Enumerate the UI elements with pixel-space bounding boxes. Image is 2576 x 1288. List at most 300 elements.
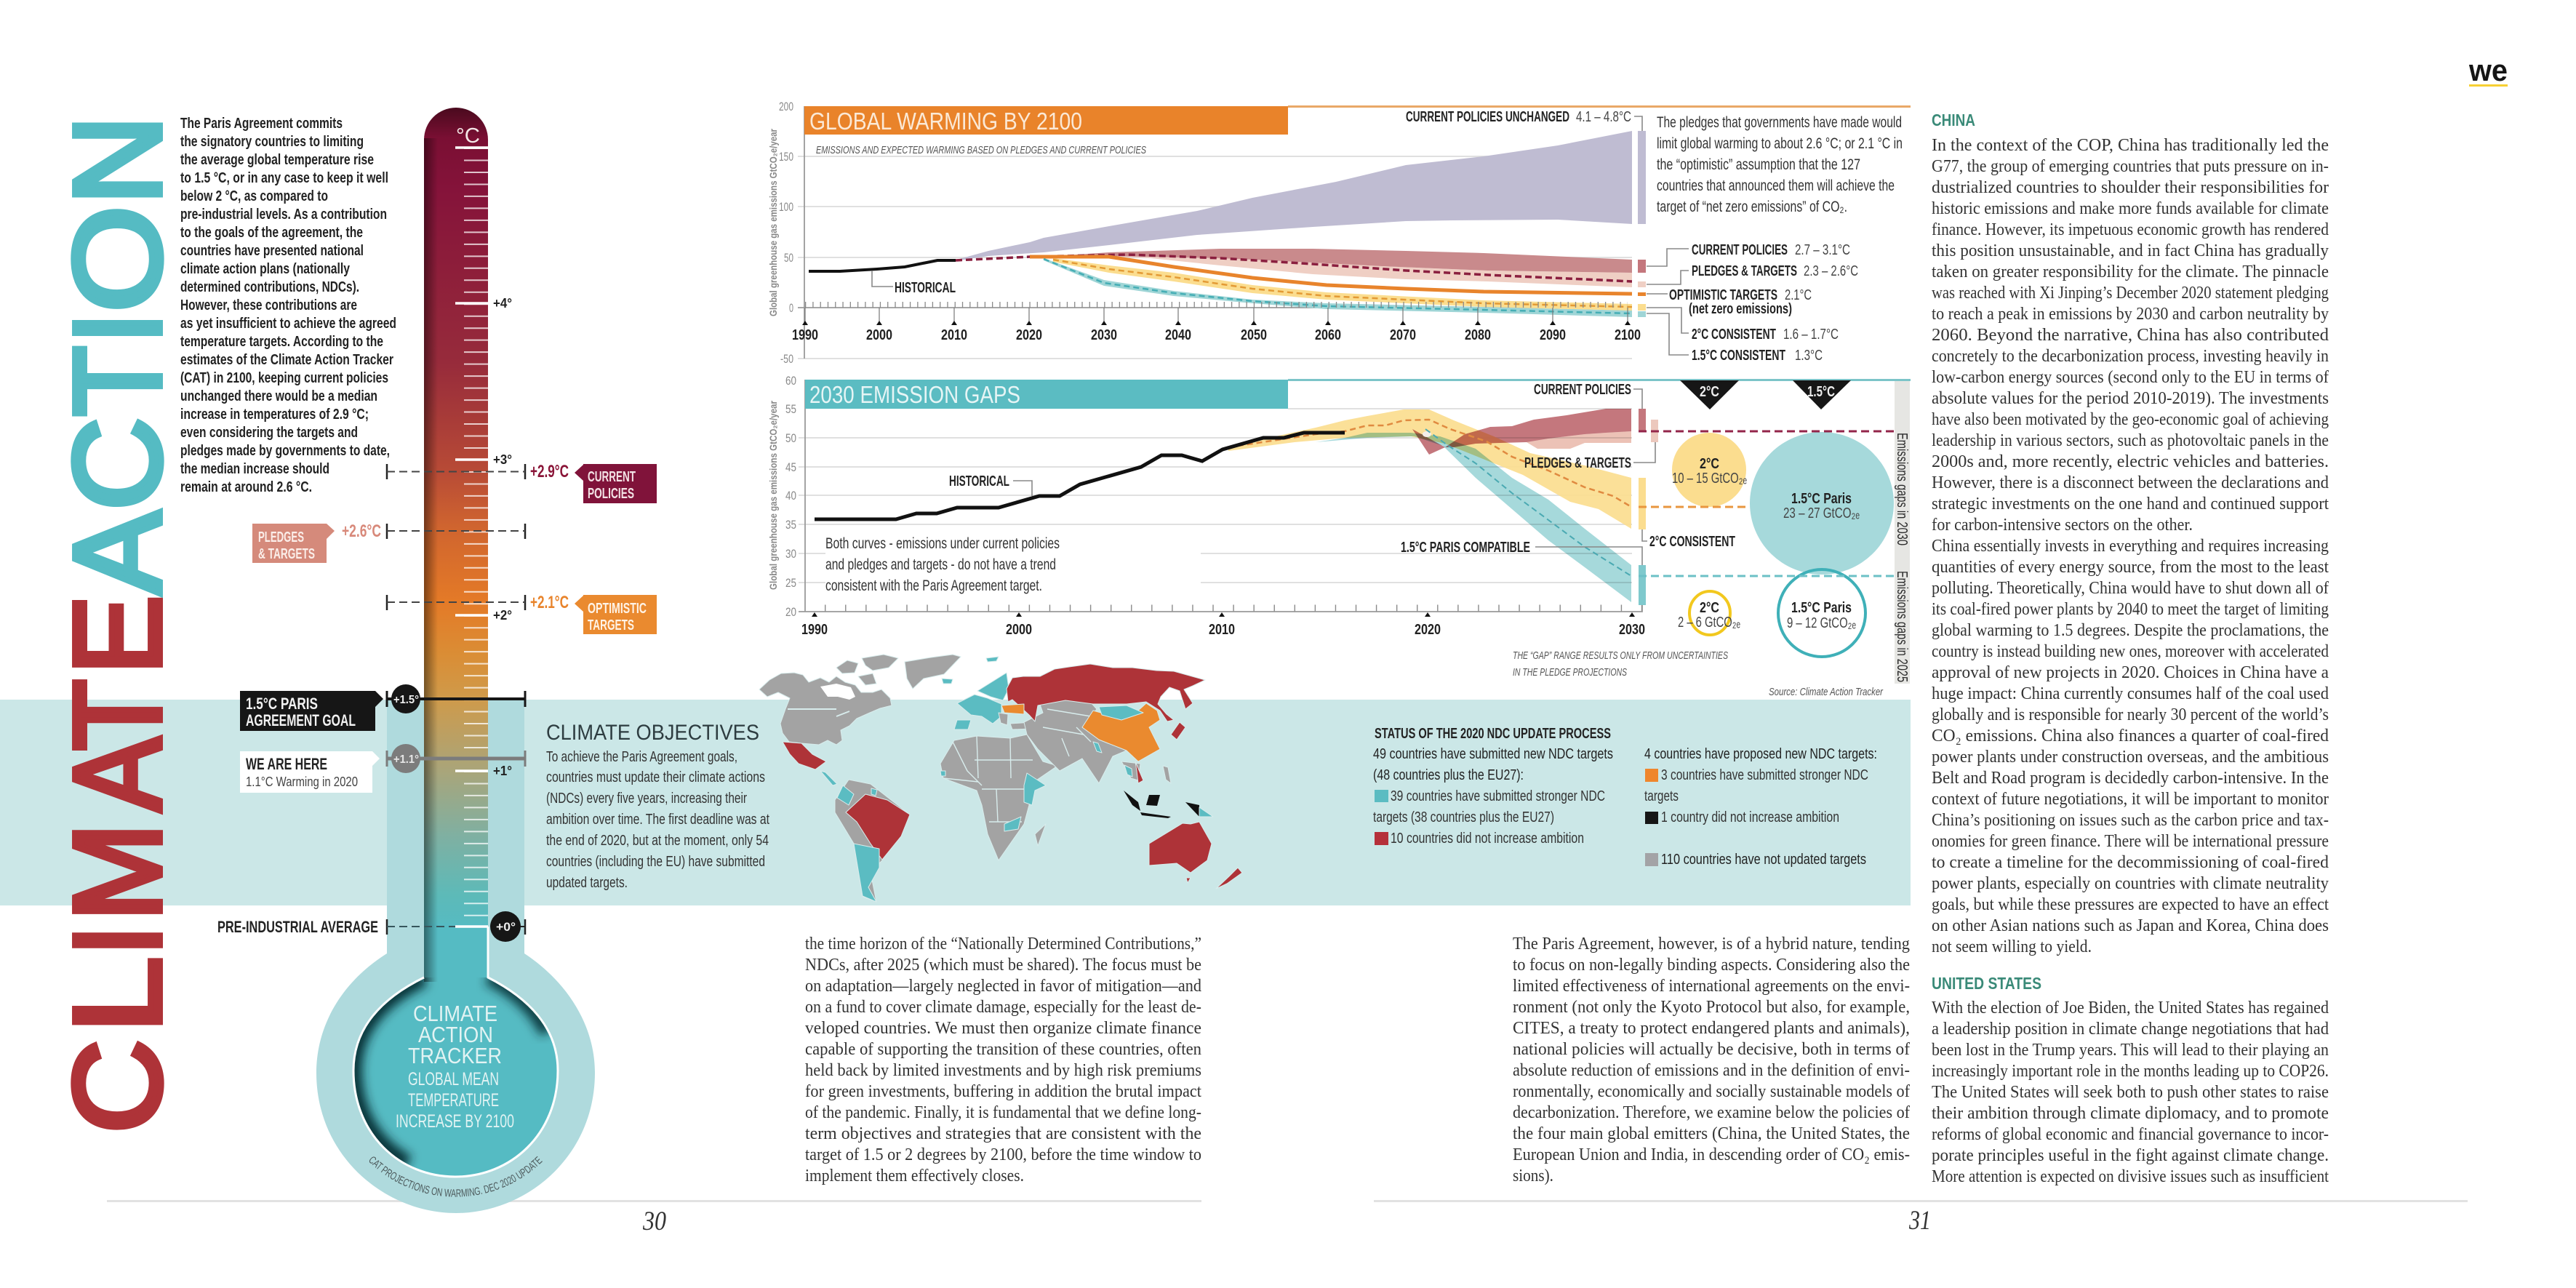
intro paragraph: Paris Agreement [180,116,396,495]
objectives body: To achieve the Paris Agreement goals, [546,749,737,765]
chart 1 year labels: 2100 [1615,327,1641,343]
map: Russia [1007,664,1205,721]
intro paragraph: Paris Agreement: remain at around 2.6 °C. [180,479,312,495]
chart 1 gridlines [798,156,1632,359]
scale ticks [455,148,488,927]
chart 2 axis [799,380,1642,612]
chart 2 dip highlight [1423,431,1431,437]
vertical title: CLIMATE ACTION: I [48,312,186,344]
map: Vietnam [1135,761,1143,783]
chart 1 header rule [1288,105,1911,108]
vertical title: CLIMATE ACTION: L [49,957,187,1033]
bulb heading: INCREASE BY 2100 [396,1111,514,1132]
chart 1 line: pledges dashed [956,255,1632,281]
map: Turkey [1010,722,1032,729]
map: Philippines [1163,766,1171,783]
chart 2 note: consistent with the Paris Agreement target. [825,577,1042,594]
page number 31: 31 [1908,1206,1931,1236]
vertical title: CLIMATE ACTION: O [49,206,187,312]
intro paragraph: Paris Agreement: the median increase should [180,461,329,477]
map: Scandinavia [977,673,1009,700]
chart 1 line: 2C dashed [1053,260,1632,307]
marker: pre-industrial average [217,911,525,942]
side strip: Emissions gaps in 2025 [1894,571,1910,682]
chart 1 year labels: 2060 [1315,327,1341,343]
chart 1 y axis title: Global greenhouse gas emissions GtCO₂e/year [767,129,779,316]
marker: +2.6 pledges and targets: & TARGETS [258,546,315,562]
chart 2 label: pledges and targets: PLEDGES & TARGETS [1524,455,1631,471]
scale labels: +1° [493,764,512,778]
world map [759,655,1242,902]
article column: page 30: for green investments, buffering in addition the brutal impact [805,1081,1201,1101]
China body text: China essentially invests in everything and requires increasing [1932,536,2329,556]
chart 2 note: and pledges and targets - do not have a trend [825,556,1056,573]
gap bubble: 1.5C in 2030: 23 – 27 GtCO₂ₑ [1783,505,1860,521]
chart 2 line: historical [815,433,1345,519]
source line: Source: Climate Action Tracker [1769,686,1884,698]
chart 2 year labels: 2030 [1619,622,1645,638]
chart 1 year labels: 2000 [866,327,892,343]
legend column 1: 10 countries did not increase ambition [1391,831,1584,847]
chart 1 year labels: 1990 [792,327,818,343]
map: Chile and Argentina [854,844,879,902]
China body text: leadership in various sectors, such as photovoltaic panels in the [1932,431,2329,450]
map: Indonesia [1124,791,1199,818]
chart 2 y axis labels: 35 [785,518,796,532]
objectives body: countries must update their climate actions [546,769,765,785]
chart 2 y axis labels: 30 [785,547,796,561]
legend column 1 [1373,746,1613,847]
article column: page 30: on adaptation—largely neglected in favor of mitigation—and [805,976,1201,996]
chart 2 gap note [1513,649,1728,679]
chart 2 area: 1.5C compatible [1316,433,1631,602]
chart 1 area: current policies unchanged [954,131,1632,261]
China body text: low-carbon energy sources (second only to the EU in terms of [1932,367,2329,387]
article column: page 31 left: the four main global emitters (China, the United States, the [1513,1124,1910,1143]
chart 2 y axis labels [785,374,796,619]
gap bubble: 1.5C in 2030 [1750,432,1894,575]
chart 1 label: pledges and targets: 2.3 – 2.6°C [1804,263,1858,279]
map: Arctic island north [862,655,898,671]
bulb heading: TEMPERATURE [408,1090,499,1111]
map: Madagascar [1035,824,1046,846]
chart 1 y axis labels: 0 [789,301,793,315]
article column: page 31 left: The Paris Agreement, however, is of a hybrid nature, tending [1513,934,1910,953]
heading: China: CHINA [1932,111,1975,129]
chart 2 year labels: 2000 [1006,622,1032,638]
map: Ukraine [1001,704,1024,714]
China body text: context of future negotiations, it will be important to monitor [1932,789,2329,809]
article column: page 31 left [1513,934,1911,1185]
bulb outline [353,927,558,1177]
United States body text: a leadership position in climate change negotiations that had [1932,1019,2329,1039]
article column: page 30: target of 1.5 or 2 degrees by 2100, before the time window to [805,1145,1201,1164]
United States body text: their ambition through climate diplomacy, and to promote [1932,1103,2329,1123]
side strip: Emissions gaps in 2030 [1894,433,1910,545]
China body text: its coal-fired power plants by 2040 to meet the target of limiting [1932,599,2329,619]
chart 1 label: pledges and targets: PLEDGES & TARGETS [1692,263,1797,279]
United States body text [1932,998,2329,1186]
gap marker: 1.5C triangle: 1.5°C [1807,384,1835,400]
map: East Africa [1024,773,1046,805]
map: Hudson Bay [820,684,855,700]
map: Europe [957,695,1001,724]
intro paragraph: Paris Agreement: pledges made by governments to date, [180,443,390,459]
bulb heading: CLIMATE [413,1001,497,1026]
map: Iran teal [1093,742,1102,753]
China body text: taken on greater responsibility for the climate. The pinnacle [1932,262,2329,281]
chart panel: global warming by 2100 [767,100,1911,366]
chart 1 label: current policies: CURRENT POLICIES [1692,242,1788,258]
map: West Africa [940,771,945,776]
chart 2 label: 1.5C compatible: 1.5°C PARIS COMPATIBLE [1401,540,1530,556]
chart 1 y axis labels [779,100,793,366]
chart 1 year labels: 2020 [1016,327,1042,343]
intro paragraph: Paris Agreement: below 2 °C, as compared to [180,188,328,204]
gap ring: 2C in 2025: 2 – 6 GtCO₂ₑ [1678,615,1740,631]
map: Spain [954,720,971,729]
chart 2 area: pledges and targets [1527,431,1631,449]
China body text: quantities of every energy source, from the most to the least [1932,557,2329,577]
objectives body [546,749,769,891]
China body text: strategic investments on the one hand and continued support [1932,494,2329,513]
chart 1 title: GLOBAL WARMING BY 2100 [809,108,1082,135]
legend: status of the NDC update [1373,726,1877,868]
chart 2 y axis labels: 20 [785,605,796,619]
thermometer [316,108,595,1213]
chart 1 label: current policies unchanged: CURRENT POLICIES UNCHANGED [1406,109,1569,125]
article column: page 30: veloped countries. We must then organize climate finance [805,1018,1201,1038]
China body text: for carbon-intensive sectors on the other. [1932,515,2193,535]
bulb heading [396,1001,514,1132]
chart 1 subtitle: EMISSIONS AND EXPECTED WARMING BASED ON PLEDGES AND CURRENT POLICIES [816,144,1146,156]
intro paragraph: Paris Agreement: However, these contributions are [180,297,357,313]
map: South America [835,780,910,902]
legend column 1: 49 countries have submitted new NDC targets [1373,746,1613,762]
chart 1 yearly ticks [805,302,1628,308]
vertical title: CLIMATE ACTION: A [49,511,187,594]
marker: +2.1 optimistic targets: TARGETS [588,617,634,633]
map: Africa [940,735,1057,860]
objectives body: updated targets. [546,875,628,891]
scale labels [493,296,512,778]
legend heading: STATUS OF THE 2020 NDC UPDATE PROCESS [1375,726,1611,742]
chart 2 yearly ticks [825,605,1642,611]
curved credit: CAT PROJECTIONS ON WARMING. DEC 2020 UPDATE [369,1156,543,1197]
intro paragraph: Paris Agreement: (CAT) in 2100, keeping current policies [180,370,388,386]
marker: +2.9 current policies [387,462,657,503]
gap ring: 1.5C in 2025: 1.5°C Paris [1791,600,1852,616]
gap bubble: 2C in 2030 [1672,433,1747,507]
article column: page 31 left: ronmentally, economically and socially sustainable models of [1513,1081,1911,1101]
chart 2 y axis title: Global greenhouse gas emissions GtCO₂e/year [767,401,779,590]
intro paragraph: Paris Agreement: to 1.5 °C, or in any case to keep it well [180,170,388,186]
United States body text: porate principles useful in the fight against climate change. [1932,1145,2329,1165]
chart 2 label: historical [949,473,1032,496]
gap marker: 1.5C triangle [1793,380,1851,409]
page number 30: 30 [642,1207,666,1236]
chart 1 label: historical: HISTORICAL [895,280,956,296]
chart 1 label: optimistic targets: (net zero emissions) [1689,301,1792,317]
article column: United States [1932,974,2329,1186]
intro paragraph: Paris Agreement: pre-industrial levels. As a contribution [180,207,387,223]
China body text: power plants, especially on countries with climate neutrality [1932,873,2329,893]
chart 2 gap note: IN THE PLEDGE PROJECTIONS [1513,666,1627,679]
degree symbol: °C [456,124,480,148]
China body text: historic emissions and make more funds available for climate [1932,199,2329,218]
gap marker: 2C triangle: 2°C [1700,384,1719,400]
article column: page 30: the time horizon of the “Nationally Determined Contributions,” [805,934,1201,953]
China body text: was reached with Xi Jinping’s December 2020 statement pledging [1932,283,2329,303]
article column: page 30: held back by limited investments and by high risk premiums [805,1060,1201,1080]
intro paragraph: Paris Agreement: as yet insufficient to achieve the agreed [180,316,396,332]
China body text: to reach a peak in emissions by 2030 and carbon neutrality by [1932,304,2329,324]
United States body text: been lost in the Trump years. This will lead to their playing an [1932,1040,2329,1060]
gap ring: 1.5C in 2025 [1778,569,1865,657]
chart 1 label: optimistic targets: 2.1°C [1785,287,1812,303]
chart 1 line: historical [809,260,956,271]
chart 1 y axis labels: 50 [784,251,793,265]
legend column 2: targets [1644,788,1679,804]
China body text: globally and is responsible for nearly 30 percent of the world’s [1932,705,2329,724]
chart 2 year labels: 2010 [1209,622,1235,638]
vertical title: CLIMATE ACTION [48,116,187,1133]
intro paragraph: Paris Agreement: the signatory countries to limiting [180,134,364,150]
chart 1 area: pledges and targets [1109,256,1632,287]
marker: +2.9 current policies: CURRENT [588,469,636,485]
map: Japan [1171,722,1185,740]
map: Thailand [1124,765,1132,777]
intro paragraph: Paris Agreement: even considering the targets and [180,425,358,441]
logo: we: we [2468,53,2508,87]
chart 2 label: current policies: CURRENT POLICIES [1534,382,1631,398]
China body text: finance. However, its impetuous economic growth has rendered [1932,220,2329,239]
thermometer outer glass [316,700,595,1213]
chart 1 year labels [792,327,1641,343]
map: New Zealand [1216,868,1242,889]
China body text: onomies for green finance. There will be international pressure [1932,831,2329,851]
chart 1 note [1657,114,1903,215]
map: Central and South Asia [1024,697,1127,783]
chart 2 year labels: 2020 [1415,622,1441,638]
article column: page 31 left: limited effectiveness of international agreements on the envi- [1513,976,1910,996]
article column: page 31 left: national policies will actually be decisive, both in terms of [1513,1039,1911,1059]
chart 2 note: Both curves - emissions under current policies [825,535,1060,552]
chart 1 area: 2 consistent [1053,258,1632,311]
chart 2 label: 2C consistent: 2°C CONSISTENT [1649,534,1735,550]
chart 1 year labels: 2070 [1390,327,1416,343]
chart 2 line: 2C dashed [1228,420,1631,507]
map: African borders [943,736,1033,822]
chart 2 y axis labels: 55 [785,402,796,416]
objectives body: the end of 2020, but at the moment, only 54 [546,833,769,849]
chart 2 label: 1.5C compatible [1401,540,1642,565]
United States body text: With the election of Joe Biden, the United States has regained [1932,998,2329,1017]
chart 2 header rule [1288,379,1911,381]
chart 1 note: countries that announced them will achieve the [1657,177,1895,194]
marker: +2.9 current policies: POLICIES [588,486,634,502]
gap bubble: 2C in 2030: 10 – 15 GtCO₂ₑ [1672,471,1747,487]
chart 2 area: 2C consistent [1228,409,1631,529]
gap bubble: 1.5C in 2030: 1.5°C Paris [1791,491,1852,507]
chart 1 label: 2C consistent [1647,308,1839,343]
objectives body: ambition over time. The first deadline was at [546,812,769,828]
marker: +2.9 current policies: +2.9°C [530,462,569,481]
map: Brazil [846,794,910,860]
chart 1 note: the “optimistic” assumption that the 127 [1657,156,1860,173]
map: Balkans [999,713,1008,725]
gap bubble: 2C in 2030: 2°C [1700,456,1719,472]
legend column 2: 1 country did not increase ambition [1661,809,1839,825]
legend column 1: targets (38 countries plus the EU27) [1373,809,1554,825]
intro paragraph: Paris Agreement: unchanged there would be a median [180,388,377,404]
chart 1 area: current policies [1055,249,1632,273]
marker: +2.1 optimistic targets: OPTIMISTIC [588,601,647,617]
chart 1 year labels: 2040 [1165,327,1191,343]
legend column 2: 110 countries have not updated targets [1661,852,1866,868]
marker: 1.5 Paris agreement goal: 1.5°C PARIS [246,695,318,713]
China body text: polluting. Theoretically, China would have to shut down all of [1932,578,2329,598]
map: Southeast Asia [1121,761,1140,780]
marker: +2.1 optimistic targets [387,593,657,634]
marker: pre-industrial average: +0° [496,920,516,934]
chart 2 label: historical: HISTORICAL [949,473,1009,489]
chart 1 note: limit global warming to about 2.6 °C; or 2.1 °C in [1657,135,1903,152]
teal band: climate objectives [0,700,1911,905]
side strip [1894,381,1910,684]
vertical title: CLIMATE ACTION: T [48,679,186,751]
chart 2 year markers [812,612,1635,617]
gap ring: 2C in 2025: 2°C [1700,600,1719,616]
article column: page 30 [805,934,1201,1185]
chart 1 line: 1.5C dashed [1044,259,1632,313]
China body text: on other Asian nations such as Japan and Korea, China does [1932,916,2329,935]
vertical title: CLIMATE ACTION: C [48,417,186,511]
legend column 1: 39 countries have submitted stronger NDC [1391,788,1605,804]
China body text: global warming to 1.5 degrees. Despite the proclamations, the [1932,620,2329,640]
map: Arctic island east [858,673,876,685]
intro paragraph: Paris Agreement: to the goals of the agreement, the [180,225,363,241]
China body text: China’s positioning on issues such as the carbon price and tax- [1932,810,2329,830]
China body text [1932,135,2329,956]
marker: we are here 1.1: WE ARE HERE [246,755,327,773]
China body text: have also been motivated by the geo-economic goal of achieving [1932,409,2329,429]
map: Papua New Guinea [1199,807,1213,817]
vertical title: CLIMATE ACTION: M [49,823,187,921]
scale labels: +3° [493,452,512,467]
China body text: However, there is a disconnect between the declarations and [1932,473,2329,492]
chart 1 y axis labels: 100 [779,200,793,214]
legend column 2 [1644,746,1877,868]
intro paragraph: Paris Agreement: increase in temperatures of 2.9 °C; [180,407,369,423]
United States body text: reforms of global economic and financial governance to incor- [1932,1124,2329,1144]
gap marker: 2C triangle [1680,380,1739,409]
intro paragraph: Paris Agreement: countries have presented national [180,243,364,259]
China body text: huge impact: China currently consumes half of the coal used [1932,684,2329,703]
map: Tasmania [1186,878,1191,883]
China body text: power plants under construction overseas, and the ambitious [1932,747,2329,767]
China body text: 2000s and, more recently, electric vehicles and batteries. [1932,452,2329,471]
marker: pre-industrial average: PRE-INDUSTRIAL AVERAGE [217,918,378,936]
legend column 1: (48 countries plus the EU27): [1373,767,1524,783]
marker: we are here 1.1: 1.1°C Warming in 2020 [246,775,358,789]
article column: page 30: on a fund to cover climate damage, especially for the least de- [805,997,1201,1017]
marker: +2.6 pledges and targets: +2.6°C [342,521,381,541]
chart 1 label: 2C consistent: 2°C CONSISTENT [1692,327,1776,343]
heading: United States: UNITED STATES [1932,974,2041,993]
marker: 1.5 Paris agreement goal: +1.5° [393,694,419,706]
China body text: absolute values for the period 2010-2019). The investments [1932,388,2329,408]
article column: page 31 left: ronment (not only the Kyoto Protocol but also, for example, [1513,997,1910,1017]
objectives heading: CLIMATE OBJECTIVES [546,721,759,745]
China body text: approval of new projects in 2020. Choices in China have a [1932,663,2329,682]
chart 1 year labels: 2090 [1540,327,1566,343]
marker: +2.1 optimistic targets: +2.1°C [530,593,569,612]
China body text: country is instead building new ones, moreover with accelerated [1932,641,2329,661]
footer rule left [107,1200,1201,1202]
chart 2 side bars [1639,409,1658,605]
chart 1 label: 1.5C consistent: 1.5°C CONSISTENT [1692,348,1785,364]
China body text: 2060. Beyond the narrative, China has also contributed [1932,325,2329,345]
chart 2 y axis labels: 25 [785,576,796,590]
chart 2 year labels: 1990 [801,622,828,638]
vertical title: CLIMATE ACTION: T [48,346,186,416]
chart panel: 2030 emission gaps [767,374,1911,698]
vertical title: CLIMATE ACTION: N [49,116,187,204]
China body text: not seem willing to yield. [1932,937,2092,956]
scale labels: +2° [493,608,512,623]
China body text: G77, the group of emerging countries that puts pressure on in- [1932,156,2329,176]
chart 1 y axis labels: 150 [779,150,793,164]
article column: page 31 left: European Union and India, in descending order of CO₂ emis- [1513,1145,1910,1164]
chart 2 header bar [805,380,1288,409]
map: Iceland [942,679,953,684]
chart 1 label: current policies: 2.7 – 3.1°C [1795,242,1850,258]
chart 2 y axis labels: 45 [785,460,796,474]
objectives body: (NDCs) every five years, increasing their [546,791,747,807]
article column: page 30: term objectives and strategies that are consistent with the [805,1124,1201,1143]
chart 1 label: optimistic targets: OPTIMISTIC TARGETS [1669,287,1777,303]
tube side shadow [424,138,438,982]
intro paragraph: Paris Agreement: The Paris Agreement commits [180,116,343,132]
intro paragraph: Paris Agreement: the average global temperature rise [180,152,374,168]
chart 1 label: historical [872,271,956,296]
vertical title: CLIMATE ACTION: C [48,1040,186,1133]
chart 2 area: current policies [1412,409,1631,455]
marker: +2.6 pledges and targets [252,521,525,563]
China body text: concretely to the decarbonization process, investing heavily in [1932,346,2329,366]
scale labels: +4° [493,296,512,311]
chart 1 year labels: 2030 [1091,327,1117,343]
chart 1 axis [798,106,1632,359]
article column: page 30: implement them effectively closes. [805,1166,1024,1185]
article column: page 30: of the pandemic. Finally, it is fundamental that we define long- [805,1103,1201,1122]
chart 2 y axis labels: 50 [785,431,796,445]
chart 2 gap lines [1639,431,1894,576]
chart 2 label: current policies [1534,382,1642,409]
chart 1 year labels: 2010 [941,327,967,343]
chart 1 label: 1.5C consistent [1647,313,1823,364]
map: Zambia [1004,817,1021,831]
bulb inner shadow [353,977,547,1164]
intro paragraph: Paris Agreement: estimates of the Climate Action Tracker [180,352,393,368]
map: Guyana [871,788,877,796]
chart 2 y axis labels: 40 [785,489,796,503]
China body text: goals, but while these pressures are expected to have an effect [1932,895,2329,914]
article column: page 30: NDCs, after 2025 (which must be shared). The focus must be [805,955,1201,975]
map: Arctic island west [836,660,858,673]
United States body text: The United States will seek both to push other states to raise [1932,1082,2329,1102]
